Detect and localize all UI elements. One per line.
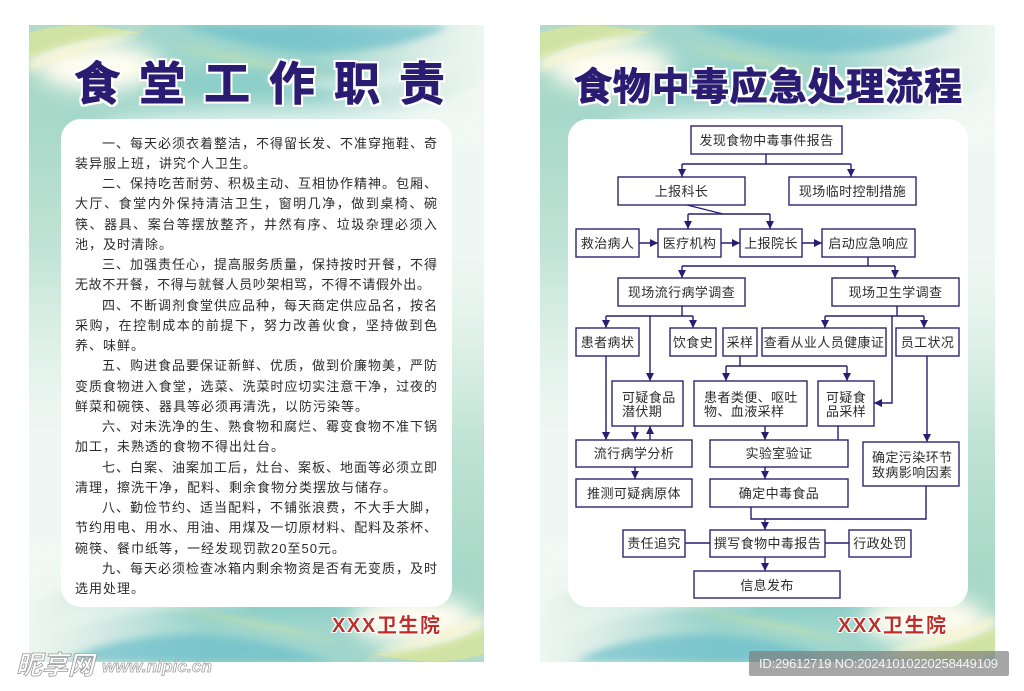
- box: staff condition: [896, 328, 959, 356]
- duty 1: [75, 136, 438, 171]
- duty 8: 碗筷、餐巾纸等，一经发现罚款20至50元。: [75, 541, 346, 556]
- duty 5: 变质食物进入食堂，选菜、洗菜时应切实注意干净，过夜的: [75, 379, 438, 394]
- box: epidemiological analysis: [576, 440, 692, 467]
- duty 4: 四、不断调剂食堂供应品种，每天商定供应品名，按名: [102, 298, 438, 313]
- duty 9: 选用处理。: [75, 581, 145, 596]
- box: staff health certificates: [762, 328, 886, 356]
- box: administrative penalty: [849, 530, 911, 557]
- duty 4: 养、味鲜。: [75, 338, 145, 353]
- box: medical institution: [658, 229, 721, 257]
- box: confirm food: [710, 479, 848, 507]
- box: diet history: 饮食史: [673, 335, 713, 350]
- box: field epidemiology: [618, 278, 745, 306]
- box: contamination factors: 致病影响因素: [872, 465, 952, 480]
- duty 1: 装异服上班，讲究个人卫生。: [75, 156, 257, 171]
- box: patient symptoms: [576, 328, 639, 356]
- box: sampling: [723, 328, 757, 356]
- box: suspect food incubation: [612, 381, 683, 426]
- box: publish information: 信息发布: [740, 578, 794, 593]
- duty 4: 采购，在控制成本的前提下，努力改善伙食，坚持做到色: [75, 318, 438, 333]
- box: suspect food incubation: 可疑食品: [622, 390, 676, 405]
- box: patient specimens: [694, 381, 807, 426]
- box: report to section chief: 上报科长: [655, 184, 708, 199]
- box: contamination factors: [863, 442, 959, 486]
- box: laboratory verification: [710, 440, 848, 467]
- box: patient symptoms: 患者病状: [581, 335, 634, 350]
- left poster background: [0, 25, 559, 662]
- box: suspect food incubation: 潜伏期: [622, 404, 662, 419]
- right poster background: [465, 25, 1024, 662]
- box: suspect food sampling: [818, 381, 874, 426]
- box: temporary control: [789, 177, 916, 205]
- duty 2: 池，及时清除。: [75, 237, 173, 252]
- left title: 食堂工作职责: [74, 58, 464, 110]
- box: write report: [710, 530, 825, 557]
- duty 6: 加工，未熟透的食物不得出灶台。: [75, 439, 285, 454]
- box: suspect food sampling: 品采样: [826, 404, 866, 419]
- box: accountability: [623, 530, 685, 557]
- duty 1: 一、每天必须衣着整洁，不得留长发、不准穿拖鞋、奇: [102, 136, 438, 151]
- duty 2: 大厅、食堂内外保持清洁卫生，窗明几净，做到桌椅、碗: [75, 196, 438, 211]
- box: confirm food: 确定中毒食品: [739, 486, 819, 501]
- duty 3: [75, 257, 438, 292]
- image id badge: ID:29612719 NO:20241010220258449109: [759, 656, 998, 671]
- box: diet history: [670, 328, 716, 356]
- poster: canteen duties: [0, 25, 559, 662]
- duty 7: 清理，擦洗干净，配料、剩余食物分类摆放与储存。: [75, 480, 397, 495]
- box: staff condition: 员工状况: [901, 335, 954, 350]
- flow boxes: [576, 126, 959, 598]
- duty 5: [75, 358, 438, 414]
- box: treat patients: 救治病人: [581, 236, 634, 251]
- duty 2: 二、保持吃苦耐劳、积极主动、互相协作精神。包厢、: [102, 176, 438, 191]
- box: epidemiological analysis: 流行病学分析: [594, 446, 674, 461]
- duty 3: 无故不开餐，不得与就餐人员吵架相骂，不得不请假外出。: [75, 277, 431, 292]
- duty 8: [75, 500, 438, 556]
- flowchart: [576, 126, 959, 598]
- box: field hygiene: 现场卫生学调查: [849, 285, 942, 300]
- box: field hygiene: [832, 278, 959, 306]
- box: publish information: [694, 571, 840, 598]
- right footer organisation name: XXX卫生院: [838, 613, 948, 637]
- box: suspect food sampling: 可疑食: [826, 390, 866, 405]
- left footer organisation name: XXX卫生院: [332, 613, 442, 637]
- box: start emergency response: [822, 229, 915, 257]
- duty 7: [75, 460, 438, 495]
- left white content panel: [61, 119, 452, 607]
- box: medical institution: 医疗机构: [663, 236, 716, 251]
- box: infer pathogen: 推测可疑病原体: [587, 486, 681, 501]
- duty 8: 节约用电、用水、用油、用煤及一切原材料、配料及茶杯、: [75, 520, 438, 535]
- box: accountability: 责任追究: [627, 536, 681, 551]
- watermark: site logo: 昵享网: [16, 650, 98, 680]
- poster: food poisoning emergency flow: [465, 25, 1024, 662]
- box: report to section chief: [618, 177, 745, 205]
- box: report to president: [740, 229, 802, 257]
- duty 9: [75, 561, 438, 596]
- box: patient specimens: 物、血液采样: [704, 404, 784, 419]
- right white content panel: [568, 119, 968, 607]
- duty 2: [75, 176, 438, 252]
- duty 3: 三、加强责任心，提高服务质量，保持按时开餐，不得: [102, 257, 438, 272]
- image id badge: [749, 651, 1009, 676]
- box: patient specimens: 患者类便、呕吐: [704, 390, 798, 405]
- duty 5: 五、购进食品要保证新鲜、优质，做到价廉物美，严防: [102, 358, 438, 373]
- box: sampling: 采样: [727, 335, 753, 350]
- box: report discovered: [691, 126, 842, 154]
- box: treat patients: [576, 229, 639, 257]
- box: report discovered: 发现食物中毒事件报告: [699, 133, 834, 148]
- connectors and arrows: [606, 154, 927, 571]
- box: staff health certificates: 查看从业人员健康证: [764, 335, 884, 350]
- duty 2: 筷、器具、案台等摆放整齐，井然有序、垃圾杂理必须入: [75, 217, 438, 232]
- duty 5: 鲜菜和碗筷、器具等必须再清洗，以防污染等。: [75, 399, 369, 414]
- duty 9: 九、每天必须检查冰箱内剩余物资是否有无变质，及时: [102, 561, 438, 576]
- box: laboratory verification: 实验室验证: [745, 446, 813, 461]
- box: temporary control: 现场临时控制措施: [799, 184, 906, 199]
- box: report to president: 上报院长: [744, 236, 798, 251]
- box: write report: 撰写食物中毒报告: [714, 536, 821, 551]
- duty 8: 八、勤俭节约、适当配料，不铺张浪费，不大手大脚，: [102, 500, 438, 515]
- watermark: site url: www.nipic.cn: [102, 657, 212, 676]
- box: contamination factors: 确定污染环节: [872, 450, 952, 465]
- right title: 食物中毒应急处理流程: [574, 67, 963, 109]
- box: field epidemiology: 现场流行病学调查: [628, 285, 735, 300]
- duty 6: 六、对未洗净的生、熟食物和腐烂、霉变食物不准下锅: [102, 419, 438, 434]
- box: administrative penalty: 行政处罚: [853, 536, 907, 551]
- duty 4: [75, 298, 438, 353]
- box: start emergency response: 启动应急响应: [828, 236, 909, 251]
- duty 6: [75, 419, 438, 454]
- box: infer pathogen: [576, 479, 692, 507]
- duty 7: 七、白案、油案加工后，灶台、案板、地面等必须立即: [102, 460, 438, 475]
- duties text block: [75, 136, 438, 596]
